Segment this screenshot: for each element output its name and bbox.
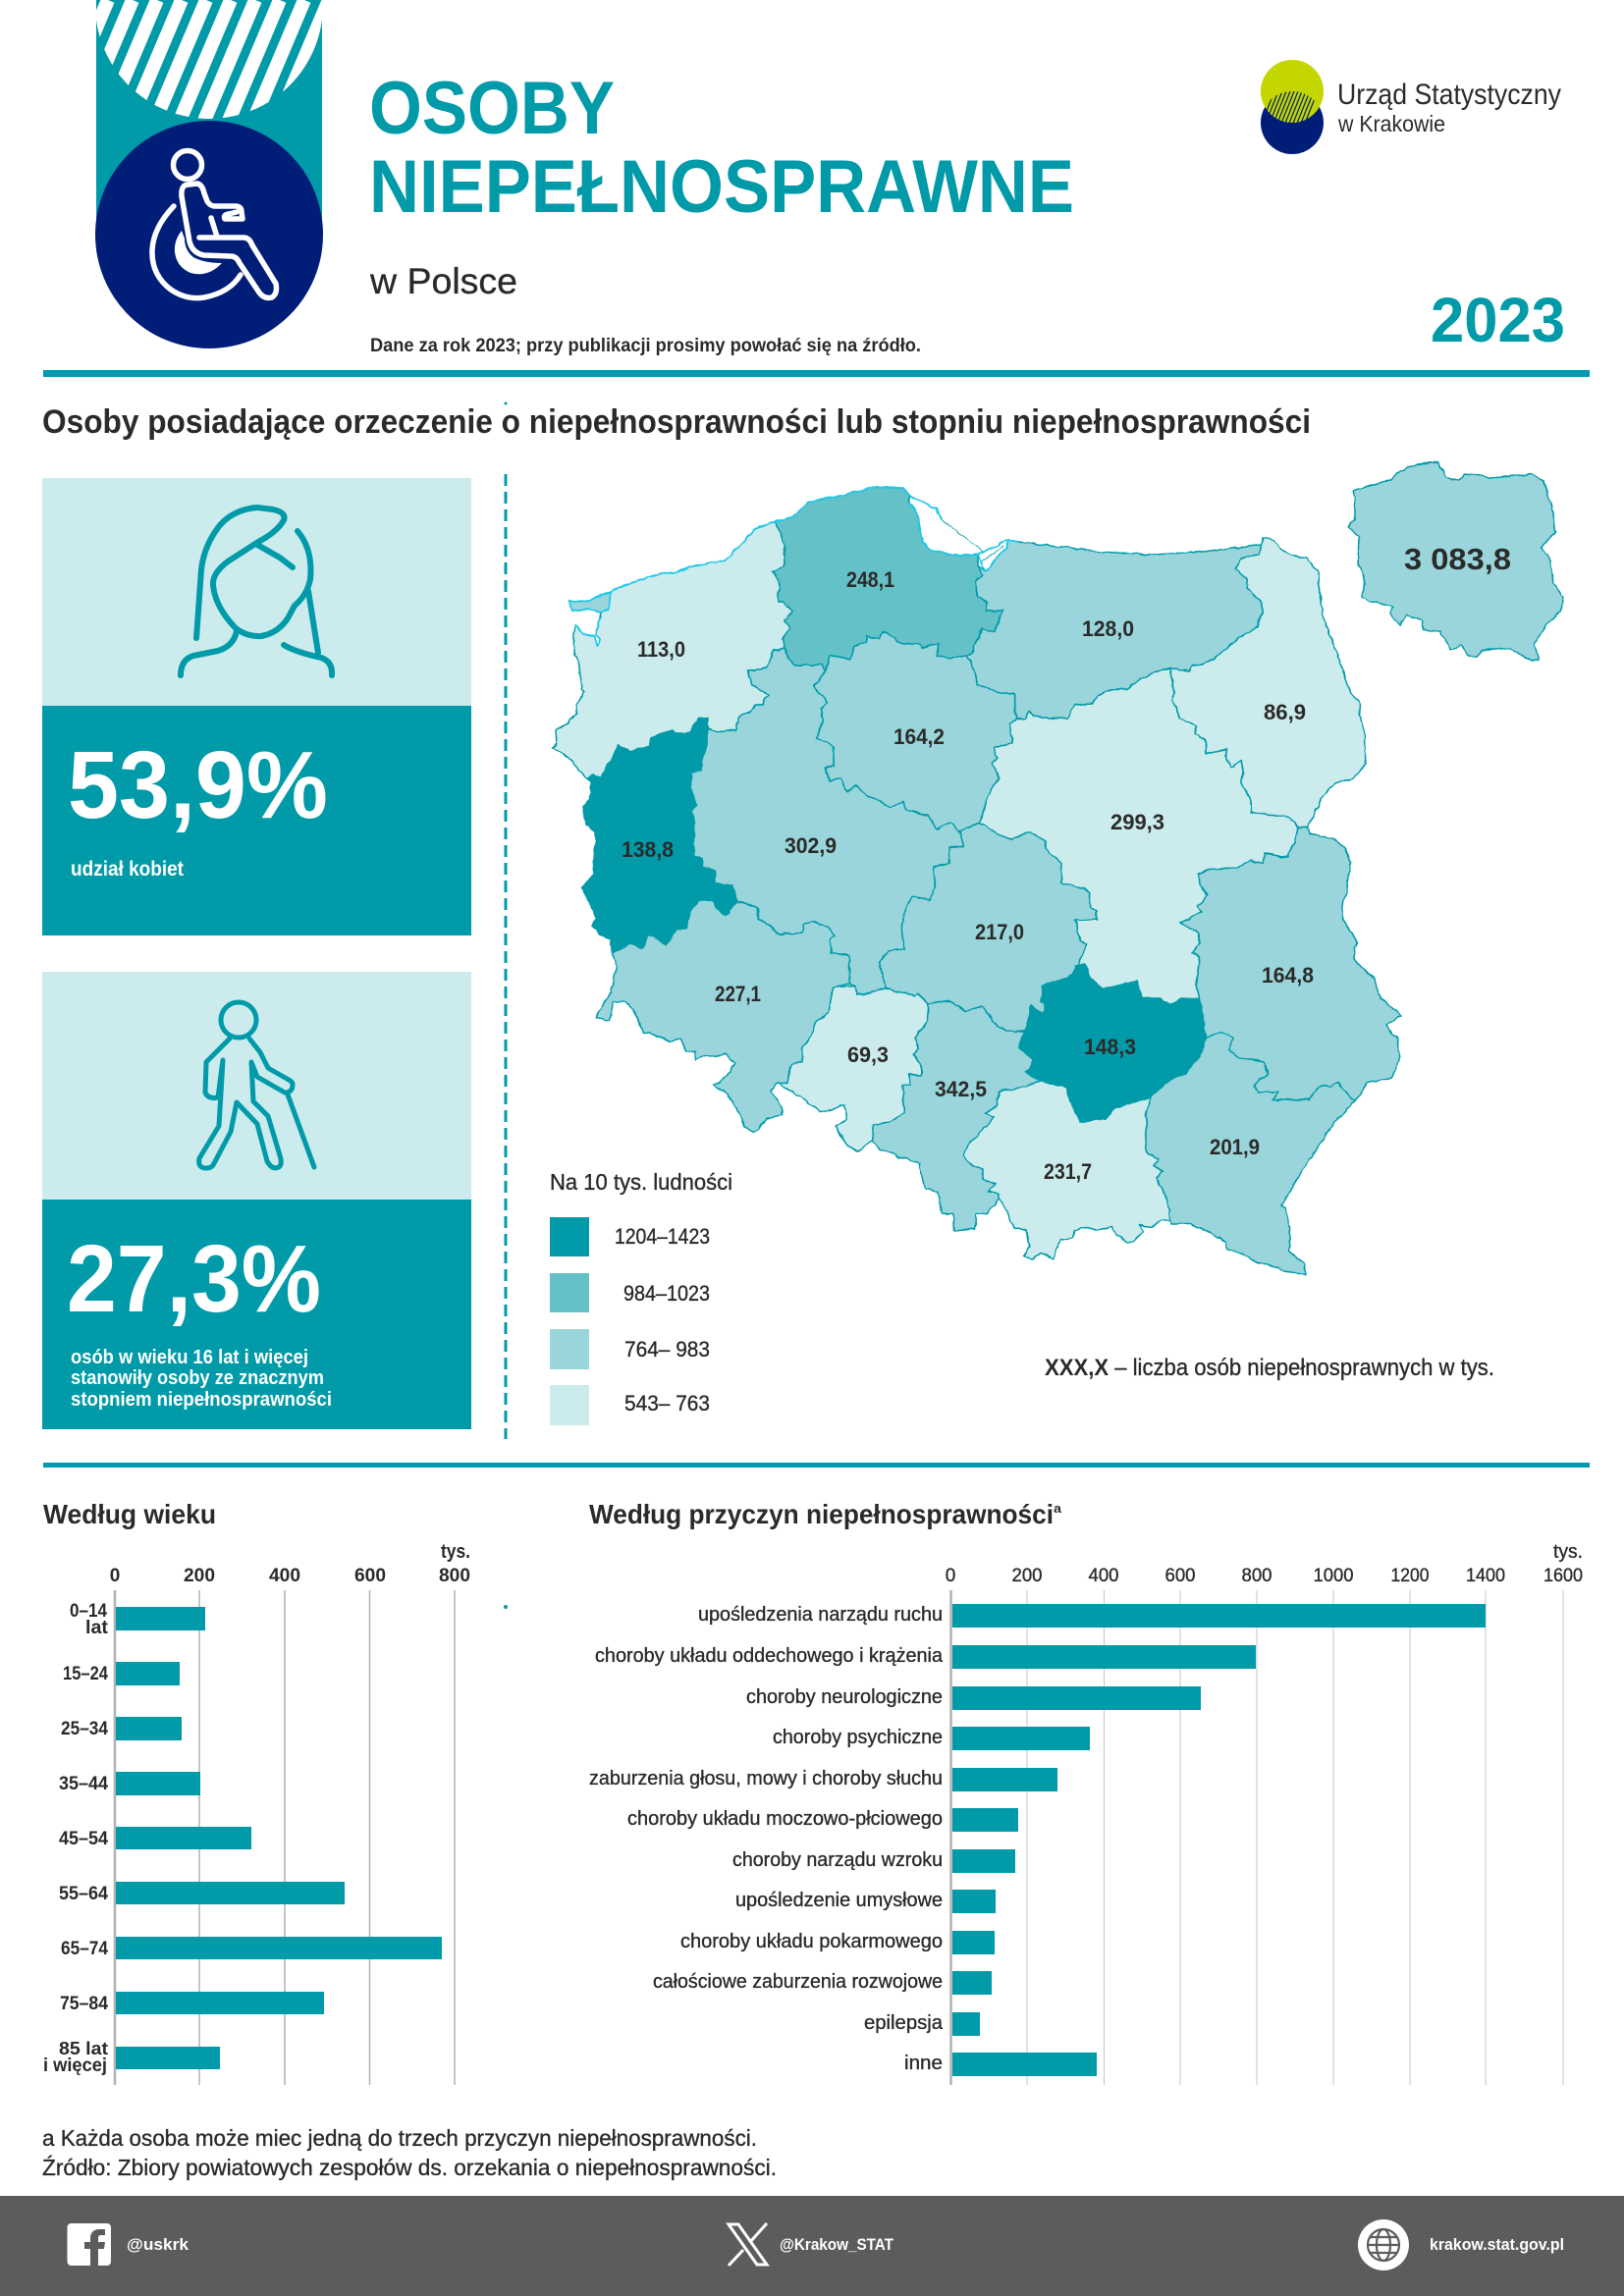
bars (116, 1607, 442, 2069)
axis labels (946, 1566, 1583, 1586)
section heading: Osoby posiadające orzeczenie o niepełnosprawności lub stopniu niepełnosprawności (42, 403, 1311, 441)
map legend: 764– 983 (624, 1337, 710, 1362)
category labels: 55–64 (59, 1884, 108, 1904)
axis labels: 1200 (1390, 1566, 1430, 1586)
category labels: 25–34 (61, 1719, 108, 1739)
category labels: 0–14 (70, 1601, 107, 1622)
category labels: choroby układu pokarmowego (680, 1931, 943, 1952)
region labels: 201,9 (1210, 1135, 1260, 1159)
axis labels: 600 (354, 1566, 386, 1586)
region labels: 342,5 (935, 1077, 987, 1101)
region labels: 299,3 (1110, 810, 1164, 834)
region labels: 231,7 (1044, 1159, 1092, 1184)
category labels: 35–44 (59, 1774, 108, 1794)
category labels: inne (904, 2053, 943, 2074)
caption: osób w wieku 16 lat i więcej (71, 1346, 308, 1368)
footnotes (42, 2125, 777, 2180)
handle: @Krakow_STAT (780, 2236, 893, 2254)
icon: globe (1358, 2219, 1409, 2270)
axis labels: 800 (1241, 1566, 1272, 1586)
chart heading: a (1054, 1501, 1062, 1516)
inset map: Poland total (1348, 462, 1563, 661)
logo (1261, 60, 1561, 154)
category labels: całościowe zaburzenia rozwojowe (653, 1971, 943, 1993)
axis labels: 200 (184, 1566, 215, 1586)
icon: X (729, 2223, 767, 2266)
category labels: choroby psychiczne (773, 1727, 943, 1748)
panel: women share (42, 478, 471, 935)
inset shape (1348, 462, 1563, 661)
bars (952, 1604, 1486, 2076)
region labels: 164,2 (893, 724, 945, 749)
icon: facebook (67, 2223, 111, 2266)
chart: by age (43, 1499, 470, 2085)
axis labels: 1600 (1543, 1566, 1583, 1586)
axis labels: 0 (110, 1566, 120, 1586)
chart heading: Według wieku (43, 1499, 216, 1529)
unit: tys. (1553, 1541, 1583, 1563)
chart heading: Według przyczyn niepełnosprawności (589, 1499, 1054, 1529)
region labels: 248,1 (846, 567, 894, 592)
map legend: 984–1023 (623, 1281, 710, 1306)
map note: XXX,X – liczba osób niepełnosprawnych w tys. (1045, 1355, 1494, 1381)
axis labels: 1400 (1466, 1566, 1505, 1586)
unit: tys. (441, 1541, 470, 1563)
region labels: 302,9 (785, 833, 837, 858)
category labels: epilepsja (864, 2012, 944, 2034)
category labels: 65–74 (61, 1939, 108, 1959)
icon: person walking with cane (199, 1002, 314, 1168)
choropleth map of Poland by voivodeship (553, 488, 1401, 1274)
axis labels (110, 1566, 470, 1586)
map legend: 543– 763 (624, 1391, 710, 1415)
source note: Dane za rok 2023; przy publikacji prosimy powołać się na źródło. (370, 335, 921, 356)
panel: significant disability share (42, 972, 471, 1429)
region labels: 86,9 (1264, 700, 1306, 724)
axis labels: 0 (946, 1566, 955, 1586)
region labels: 128,0 (1082, 616, 1134, 641)
category labels: upośledzenia narządu ruchu (698, 1604, 943, 1626)
region labels (622, 567, 1314, 1184)
caption: stanowiły osoby ze znacznym (71, 1366, 324, 1389)
region labels: 217,0 (975, 920, 1024, 944)
category labels: 75–84 (60, 1994, 108, 2014)
category labels: choroby neurologiczne (746, 1686, 943, 1708)
voivodeship shapes (553, 488, 1401, 1274)
category labels: choroby narządu wzroku (732, 1849, 943, 1871)
subtitle: w Polsce (369, 261, 517, 301)
category labels: upośledzenie umysłowe (735, 1890, 943, 1911)
map legend (550, 1169, 732, 1425)
icon: woman (181, 507, 332, 675)
axis labels: 1000 (1314, 1566, 1353, 1586)
chart: by cause of disability (589, 1499, 1583, 2085)
axis labels: 200 (1011, 1566, 1043, 1586)
category labels: i więcej (43, 2056, 107, 2076)
year: 2023 (1431, 285, 1565, 355)
value: 53,9%: 53,9% (68, 731, 328, 838)
category labels: zaburzenia głosu, mowy i choroby słuchu (589, 1768, 943, 1789)
title: NIEPEŁNOSPRAWNE (369, 145, 1074, 229)
logo: Urząd Statystyczny (1337, 79, 1561, 111)
inset total label: 3 083,8 (1404, 542, 1511, 576)
category labels: choroby układu oddechowego i krążenia (595, 1645, 944, 1667)
title: OSOBY (369, 67, 615, 150)
category labels: 85 lat (59, 2039, 108, 2058)
map legend: Na 10 tys. ludności (550, 1169, 732, 1195)
region labels: 227,1 (715, 982, 761, 1006)
axis labels: 800 (439, 1566, 470, 1586)
category labels: 15–24 (63, 1664, 108, 1684)
region labels: 164,8 (1262, 963, 1314, 988)
logo: w Krakowie (1337, 111, 1445, 136)
footnotes: Źródło: Zbiory powiatowych zespołów ds. orzekania o niepełnosprawności. (42, 2155, 777, 2180)
axis labels: 400 (269, 1566, 300, 1586)
caption: stopniem niepełnosprawności (71, 1388, 332, 1411)
header emblem: wheelchair medallion (95, 0, 323, 348)
region labels: 113,0 (637, 637, 685, 662)
caption (71, 1346, 332, 1411)
footnotes: a Każda osoba może miec jedną do trzech przyczyn niepełnosprawności. (42, 2125, 757, 2151)
region labels: 148,3 (1084, 1035, 1136, 1059)
map legend: 1204–1423 (615, 1224, 710, 1249)
title (369, 67, 1074, 229)
website: krakow.stat.gov.pl (1430, 2236, 1564, 2254)
handle: @uskrk (127, 2236, 189, 2254)
region labels: 138,8 (622, 837, 674, 862)
category labels (43, 1601, 109, 2076)
value: 27,3%: 27,3% (67, 1225, 321, 1332)
category labels: choroby układu moczowo-płciowego (627, 1808, 943, 1830)
category labels: lat (85, 1618, 109, 1638)
axis labels: 600 (1164, 1566, 1196, 1586)
footer bar (0, 2196, 1624, 2296)
category labels (589, 1604, 944, 2074)
category labels: 45–54 (59, 1829, 108, 1849)
axis labels: 400 (1088, 1566, 1119, 1586)
caption: udział kobiet (71, 858, 184, 881)
region labels: 69,3 (847, 1042, 889, 1067)
